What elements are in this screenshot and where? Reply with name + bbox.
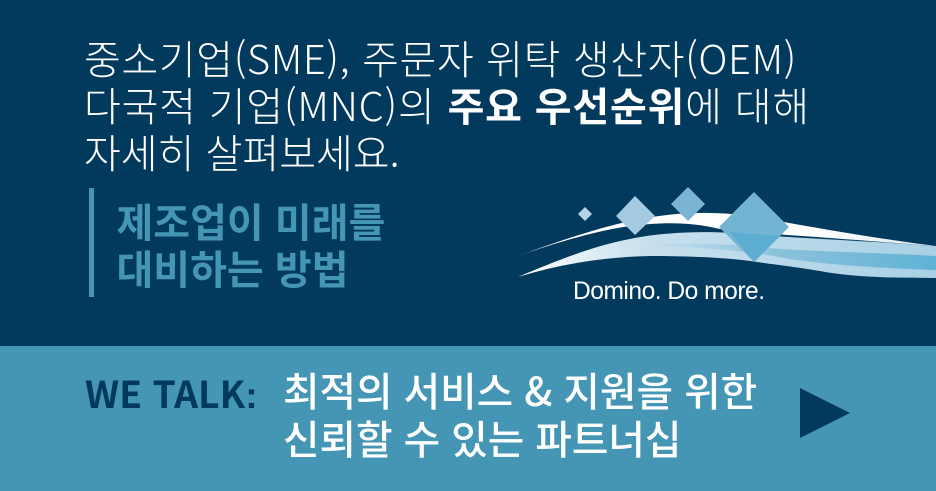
heading: main text: 자세히 살펴보세요. xyxy=(84,122,400,180)
logo: Domino swoosh and diamonds xyxy=(518,187,936,305)
small diamond xyxy=(578,207,592,221)
icon: play arrow xyxy=(800,388,850,438)
accent vertical bar xyxy=(89,188,94,297)
big diamond xyxy=(719,192,789,262)
logo text: Domino. Do more. xyxy=(573,278,765,305)
panel: bottom call to action band xyxy=(0,346,936,491)
big diamond lower shade xyxy=(730,232,780,262)
callout text: 최적의 서비스 & 지원을 위한 xyxy=(283,361,757,418)
subheading: 대비하는 방법 xyxy=(116,238,348,296)
subheading xyxy=(116,191,385,296)
blue swoosh xyxy=(518,232,936,278)
heading: main text: 중소기업(SME), 주문자 위탁 생산자(OEM) xyxy=(84,28,797,86)
diamond three xyxy=(671,187,705,221)
heading: main text: 다국적 기업(MNC)의 주요 우선순위에 대해 xyxy=(84,75,810,133)
subheading: 제조업이 미래를 xyxy=(116,191,385,249)
panel: top dark background xyxy=(0,0,936,346)
diamond two xyxy=(616,196,655,235)
label: WE TALK: WE TALK: xyxy=(85,365,258,419)
mid blue band xyxy=(610,244,936,270)
white swoosh xyxy=(518,213,936,256)
heading: main text xyxy=(84,28,810,180)
callout text: 신뢰할 수 있는 파트너십 xyxy=(283,409,681,466)
callout text xyxy=(283,361,757,466)
